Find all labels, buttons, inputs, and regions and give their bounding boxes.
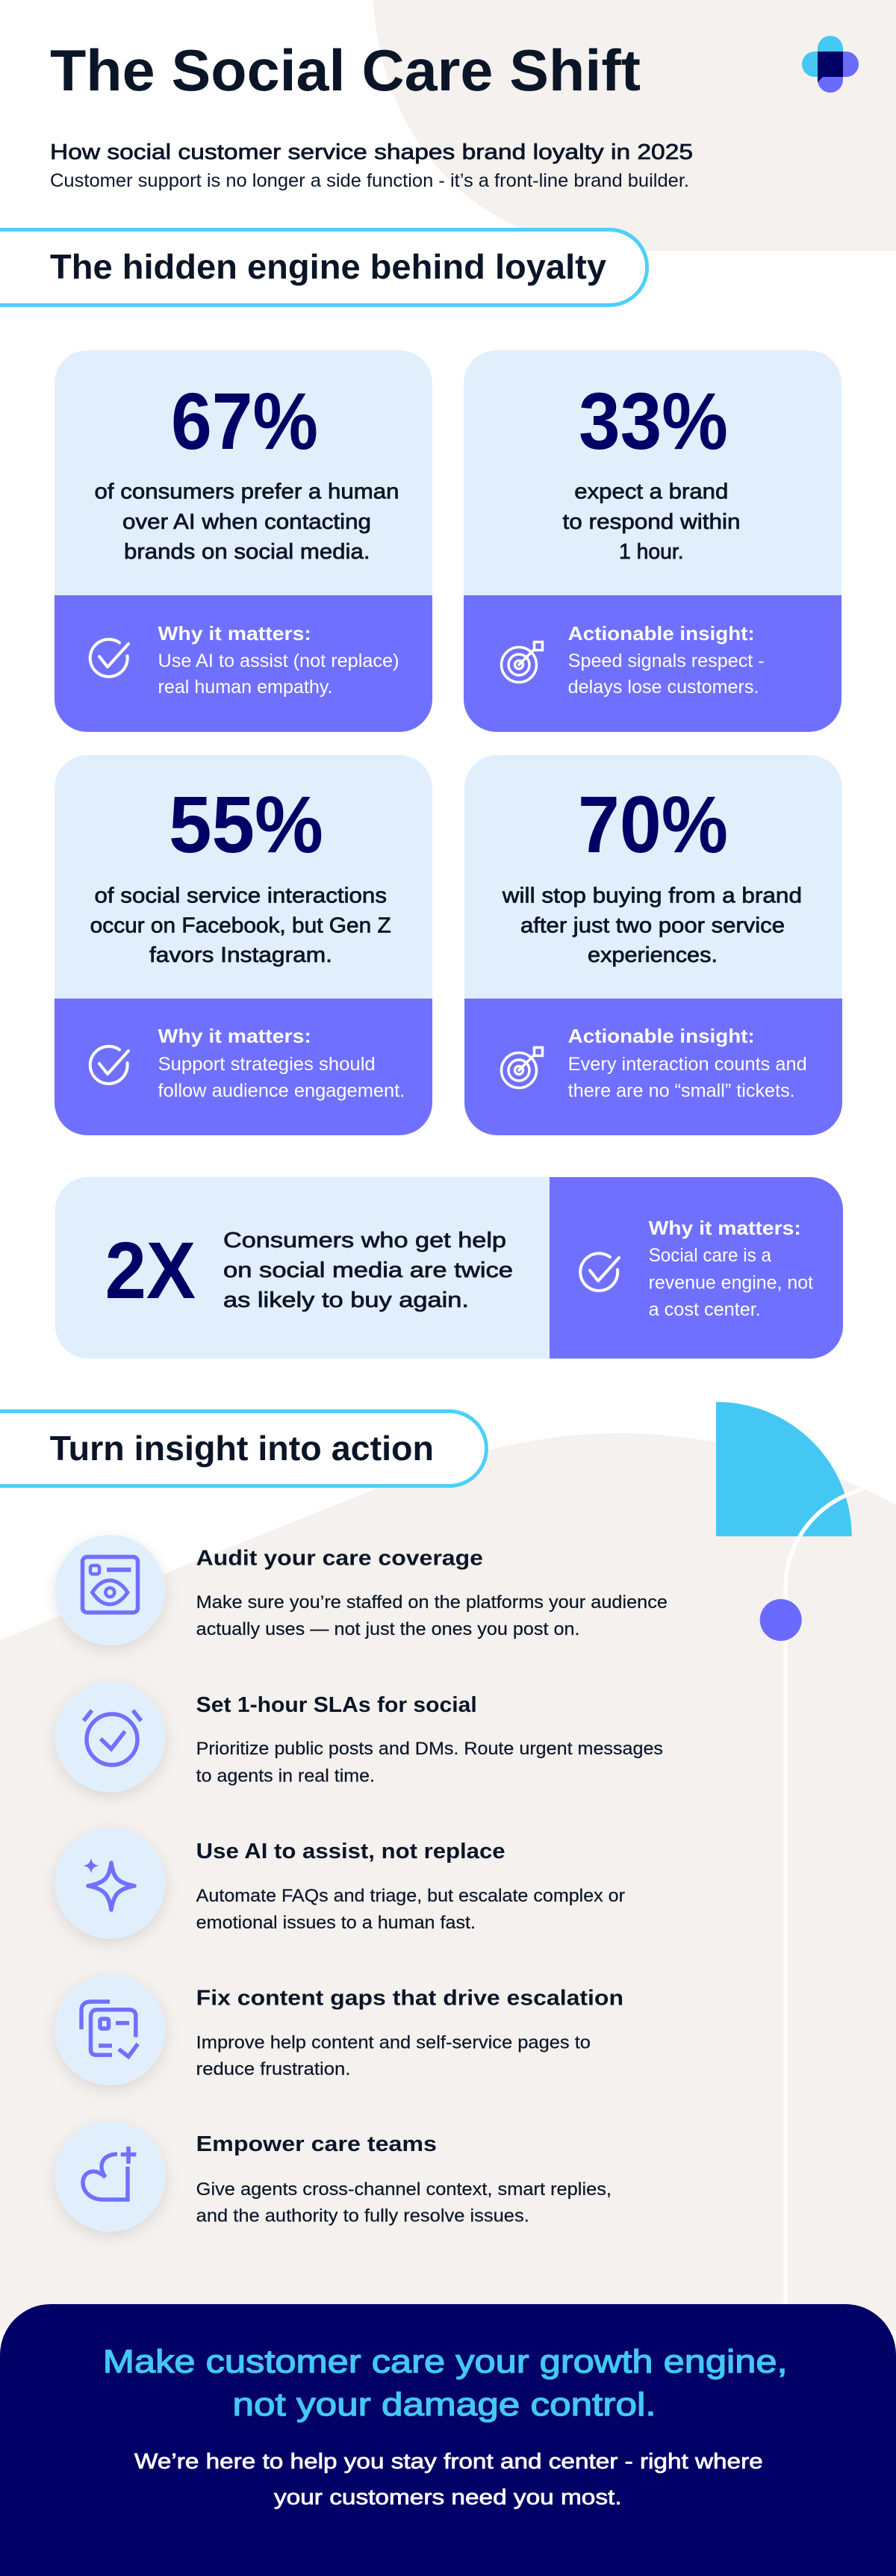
why it matters text: Why it matters: xyxy=(158,1025,311,1047)
background blob: top right xyxy=(373,0,896,251)
item heading: Use AI to assist, not replace xyxy=(196,1840,505,1863)
item description: reduce frustration. xyxy=(196,2059,350,2079)
item description xyxy=(196,1592,668,1639)
stat description: brands on social media. xyxy=(124,540,370,564)
icon circle xyxy=(55,2121,165,2232)
panel: 70% stat xyxy=(464,755,842,1135)
footer panel xyxy=(0,2304,896,2576)
actionable insight text: there are no “small” tickets. xyxy=(568,1081,795,1102)
stat description: Consumers who get help xyxy=(223,1229,506,1253)
stat description: occur on Facebook, but Gen Z xyxy=(90,914,391,938)
icon circle xyxy=(55,1535,165,1645)
why it matters text: follow audience engagement. xyxy=(158,1081,405,1102)
actionable insight text: Actionable insight: xyxy=(568,1025,755,1047)
item description: Prioritize public posts and DMs. Route urgent messages xyxy=(196,1739,663,1759)
item description: actually uses — not just the ones you post on. xyxy=(196,1619,579,1639)
heading: the hidden engine behind loyalty: The hidden engine behind loyalty xyxy=(50,247,606,286)
why it matters text: Why it matters: xyxy=(649,1217,801,1239)
item heading: Audit your care coverage xyxy=(196,1547,483,1571)
footer text: your customers need you most. xyxy=(274,2486,622,2510)
actionable insight text: Every interaction counts and xyxy=(568,1054,807,1075)
stat number: 67% xyxy=(171,376,318,466)
item description: Give agents cross-channel context, smart replies, xyxy=(196,2179,612,2200)
icon: target xyxy=(502,1047,542,1087)
action item: audit your care coverage xyxy=(55,1535,668,1645)
icon: audit eye window xyxy=(82,1557,137,1613)
stat description: experiences. xyxy=(588,943,718,967)
stat number: 33% xyxy=(579,376,728,466)
actionable insight text: Speed signals respect - xyxy=(568,651,765,671)
stat description: favors Instagram. xyxy=(149,943,332,967)
icon circle xyxy=(55,1682,165,1793)
icon: content checklist xyxy=(81,2002,138,2057)
decoration: purple dot xyxy=(760,1599,802,1641)
why it matters text xyxy=(649,1217,813,1320)
stat description xyxy=(502,884,802,967)
stat description xyxy=(223,1229,513,1312)
footer headline xyxy=(103,2344,788,2423)
icon: check circle xyxy=(90,1046,128,1084)
action item: empower care teams xyxy=(55,2121,612,2232)
stat description: of social service interactions xyxy=(94,884,387,908)
item description: Improve help content and self-service pages to xyxy=(196,2033,591,2052)
action item: set 1-hour SLAs xyxy=(55,1682,663,1793)
icon: alarm clock check xyxy=(84,1710,141,1765)
item heading: Fix content gaps that drive escalation xyxy=(196,1987,623,2011)
why it matters text xyxy=(158,1025,405,1102)
footer headline: not your damage control. xyxy=(233,2386,656,2423)
actionable insight text: Actionable insight: xyxy=(568,622,755,645)
icon: check circle xyxy=(580,1253,619,1291)
panel: 33% stat xyxy=(464,350,841,732)
title: The Social Care Shift xyxy=(50,37,641,103)
why it matters text: real human empathy. xyxy=(158,677,333,698)
why it matters text: Social care is a xyxy=(649,1245,771,1266)
heading: the hidden engine behind loyalty xyxy=(0,230,647,305)
actionable insight text: delays lose customers. xyxy=(568,677,759,698)
item description: Make sure you’re staffed on the platforms your audience xyxy=(196,1592,668,1613)
icon: heart plus xyxy=(83,2147,136,2200)
item description xyxy=(196,1739,663,1787)
decoration: white curved line xyxy=(785,1486,870,2315)
icon circle xyxy=(55,1828,165,1939)
heading: turn insight into action: Turn insight into action xyxy=(50,1429,434,1468)
why it matters text: Why it matters: xyxy=(158,622,311,645)
stat description xyxy=(90,884,391,967)
stat description xyxy=(563,479,741,564)
stat number: 70% xyxy=(578,779,728,869)
actionable insight text xyxy=(568,622,765,698)
item description xyxy=(196,2179,612,2226)
icon: sparkle xyxy=(83,1858,134,1910)
action item: fix content gaps xyxy=(55,1975,623,2085)
actionable insight text xyxy=(568,1025,807,1102)
stat description: to respond within xyxy=(563,510,741,534)
stat description: will stop buying from a brand xyxy=(502,884,802,908)
stat number: 2X xyxy=(105,1225,196,1315)
stat description: on social media are twice xyxy=(223,1258,513,1282)
item heading: Set 1-hour SLAs for social xyxy=(196,1693,477,1717)
footer text: We’re here to help you stay front and center - right where xyxy=(134,2450,763,2474)
stat description: as likely to buy again. xyxy=(223,1288,469,1312)
background blob: lower section xyxy=(0,1433,896,2330)
panel: 2X stat xyxy=(55,1177,843,1359)
panel: 55% stat xyxy=(55,755,432,1135)
item heading: Empower care teams xyxy=(196,2132,437,2156)
item description: to agents in real time. xyxy=(196,1766,375,1787)
why it matters text: revenue engine, not xyxy=(649,1273,813,1294)
heading: turn insight into action xyxy=(0,1412,487,1486)
footer text xyxy=(134,2450,763,2510)
icon: check circle xyxy=(90,639,128,677)
stat description xyxy=(94,479,399,564)
item description: and the authority to fully resolve issues. xyxy=(196,2206,529,2226)
item description xyxy=(196,1886,625,1933)
item description: Automate FAQs and triage, but escalate complex or xyxy=(196,1886,625,1906)
stat description: after just two poor service xyxy=(520,914,785,938)
why it matters text: a cost center. xyxy=(649,1300,761,1320)
icon circle xyxy=(55,1975,165,2085)
stat description: expect a brand xyxy=(574,479,728,503)
item description: emotional issues to a human fast. xyxy=(196,1913,476,1933)
stat description: 1 hour. xyxy=(619,540,684,564)
footer headline: Make customer care your growth engine, xyxy=(103,2344,788,2380)
stat number: 55% xyxy=(169,779,323,869)
panel: 67% stat xyxy=(55,350,432,732)
why it matters text: Use AI to assist (not replace) xyxy=(158,651,399,671)
stat description: of consumers prefer a human xyxy=(94,479,399,503)
intro text: Customer support is no longer a side function - it’s a front-line brand builder. xyxy=(50,170,689,191)
icon: target xyxy=(502,642,542,683)
icon: logo xyxy=(802,36,859,93)
stat description: over AI when contacting xyxy=(122,510,371,534)
action item: use AI to assist xyxy=(55,1828,625,1939)
subtitle: How social customer service shapes brand loyalty in 2025 xyxy=(50,140,693,164)
why it matters text: Support strategies should xyxy=(158,1054,376,1075)
item description xyxy=(196,2033,591,2079)
why it matters text xyxy=(158,622,399,698)
decoration: quarter circle xyxy=(716,1402,852,1536)
